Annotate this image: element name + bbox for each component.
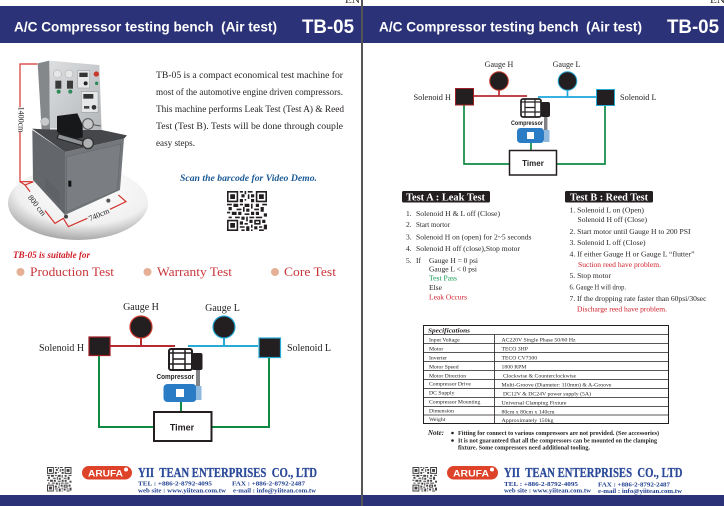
table rows: Motor Speed [429,364,459,370]
solenoid H [39,337,110,356]
test B steps: 5. Stop motor [570,271,612,280]
item: warranty test: Warranty Test [157,264,232,279]
timer box [154,412,212,441]
table rows: Weight [429,417,446,423]
test B steps: 2. Start motor until Gauge H to 200 PSI [570,227,691,236]
note text [458,430,659,452]
test A heading: Test A : Leak Test [406,192,486,204]
test B steps: 3. Solenoid L off (Close) [570,238,646,247]
solenoid H: Solenoid H [39,343,84,354]
gauge L right [553,60,580,90]
table rows: DC12V & DC24V power supply (5A) [503,390,591,398]
test B steps: Suction reed have problem. [578,260,661,269]
footer left [47,466,317,494]
compressor label right: Compressor [511,121,544,127]
test B steps: Discharge reed have problem. [577,304,667,314]
solenoid L [259,338,331,358]
ARUFA logo right [447,466,498,480]
test A steps: Solenoid H off (close),Stop motor [416,244,520,253]
ARUFA logo left [82,466,132,480]
test A steps [406,209,532,302]
contact details right: web site : www.yiitean.com.tw [504,488,591,494]
table rows: Inverter [429,356,447,362]
table rows: 1800 RPM [502,364,526,370]
bullet: core [271,268,279,276]
test B panel [565,191,707,314]
page divider [361,0,363,506]
test A steps: 5. [406,256,412,265]
test A steps: Test Pass [429,274,457,282]
solenoid L: Solenoid L [287,343,331,354]
table rows: AC220V Single Phase 50/60 Hz [502,338,576,344]
table rows: TECO CV7300 [502,356,537,362]
gauge L [205,303,240,338]
bullet: warranty [144,268,152,276]
intro paragraph: most of the automotive engine driven compressors. [156,87,343,98]
note text: fixture. Some compressors need additional tooling. [458,446,591,452]
solenoid H right [414,88,474,105]
footer QR left [47,467,72,492]
solenoid L right [596,90,657,106]
solenoid H right: Solenoid H [414,93,451,102]
machine photo [8,61,148,240]
bottom bar right [363,495,724,506]
model number left: TB-05 [302,17,354,38]
table rows: Compressor Mounting [429,400,481,406]
gauge L: Gauge L [205,303,240,314]
intro paragraph [156,70,344,149]
table rows: Input Voltage [429,338,460,344]
note text: Fitting for connect to various compressors are not provided. (See accessories) [458,430,659,437]
gauge H right: Gauge H [485,60,514,69]
timer box right: Timer [522,159,544,168]
contact details right [504,481,682,495]
contact details left: e-mail : info@yiitean.com.tw [233,488,316,494]
note label: Note: [427,429,444,437]
suitability heading: TB-05 is suitable for [13,250,90,260]
dimension: height: 1400cm [16,107,26,133]
test A steps: Gauge L < 0 psi [429,264,477,274]
left page [0,0,361,506]
timer box right [510,150,556,175]
timer box: Timer [170,422,195,432]
test B steps [570,206,707,314]
table rows: Multi-Groove (Diameter: 110mm) & A-Groove [502,382,612,388]
title right: A/C Compressor testing bench (Air test) [379,20,642,34]
table rows: DC Supply [429,390,455,396]
test B steps: Solenoid H off (Close) [578,215,648,224]
test A steps: Solenoid H & L off (Close) [416,209,500,218]
company name left: YII TEAN ENTERPRISES CO., LTD [138,466,317,481]
compressor and motor icon right [517,99,550,143]
test A steps: Solenoid H on (open) for 2~5 seconds [416,232,532,242]
ARUFA logo right: ARUFA [453,468,489,480]
header band left [0,6,361,43]
test A steps: Start mortor [416,220,450,229]
dimension: depth: 800 cm [26,193,48,218]
note bullet 1 [451,432,454,434]
intro paragraph: This machine performs Leak Test (Test A) & Reed [156,104,344,115]
test A steps: 4. [406,244,412,253]
circuit diagram right [414,60,657,175]
right page [363,0,724,506]
red dimension lines [20,64,126,227]
gauge H right [485,60,514,90]
table rows: TECO 3HP [502,346,528,352]
bullet: production [16,268,24,276]
notes [427,429,659,452]
bottom bar left [0,495,361,506]
table rows [429,338,612,424]
test A steps: Gauge H = 0 psi [429,256,478,265]
contact details left: FAX : +886-2-8792-2487 [232,480,306,488]
contact details left [138,480,316,494]
footer QR right [412,467,437,492]
intro paragraph: easy steps. [156,139,195,149]
contact details left: TEL : +886-2-8792-4095 [138,480,213,488]
dimension: width: 740cm [87,206,112,223]
test B steps: 1. Solenoid L on (Open) [570,206,645,214]
ARUFA logo left: ARUFA [88,468,123,480]
table rows: Clockwise & Counterclockwise [503,374,576,380]
note text: It is not guaranteed that all the compressors can be mounted on the clamping [458,438,657,444]
model number right: TB-05 [667,17,719,38]
item: production test: Production Test [30,264,114,279]
test A steps: 1. [406,209,412,218]
intro paragraph: TB-05 is a compact economical test machine for [156,70,344,81]
test B steps: 7. If the dropping rate faster than 60psi/30sec [570,294,707,303]
contact details right: TEL : +886-2-8792-4095 [504,481,579,488]
table rows: Dimension [429,408,454,414]
test A steps: Leak Occurs [429,292,467,302]
suitability list [16,264,336,279]
contact details right: FAX : +886-2-8792-2487 [598,482,671,488]
test B steps: 6. Gauge H will drop. [570,282,626,292]
item: core test: Core Test [284,264,336,279]
footer right [412,466,682,495]
contact details right: e-mail : info@yiitean.com.tw [598,488,682,495]
intro paragraph: Test (Test B). Tests will be done through couple [156,121,343,132]
circuit diagram left [39,302,331,441]
header band right [363,6,724,43]
table rows: Approximately 150kg [502,418,554,424]
title left: A/C Compressor testing bench (Air test) [14,20,277,34]
table rows: Motor [429,346,443,352]
compressor and motor icon [164,349,202,402]
specifications table [424,326,668,424]
table rows: 80cm x 80cm x 140cm [502,410,555,416]
solenoid L right: Solenoid L [620,93,657,102]
test A panel [402,191,532,302]
test B steps: 4. If either Gauge H or Gauge L “flutter” [570,250,694,258]
contact details left: web site : www.yiitean.com.tw [138,488,226,494]
gauge H [123,302,159,338]
test A steps: 3. [406,232,412,242]
test A steps: If [416,256,421,265]
test B heading: Test B : Reed Test [570,192,649,204]
test A steps: Else [429,283,443,292]
compressor label: Compressor [156,372,194,381]
table header: Specifications [428,328,471,334]
table rows: Motor Direction [429,374,466,380]
video QR code [227,191,267,231]
gauge H: Gauge H [123,302,159,313]
table rows: Universal Clamping Fixture [502,400,567,406]
table rows: Compressor Drive [429,382,471,388]
gauge L right: Gauge L [553,60,580,69]
video demo caption: Scan the barcode for Video Demo. [180,174,317,184]
test A steps: 2. [406,220,412,229]
note bullet 2 [451,439,454,442]
